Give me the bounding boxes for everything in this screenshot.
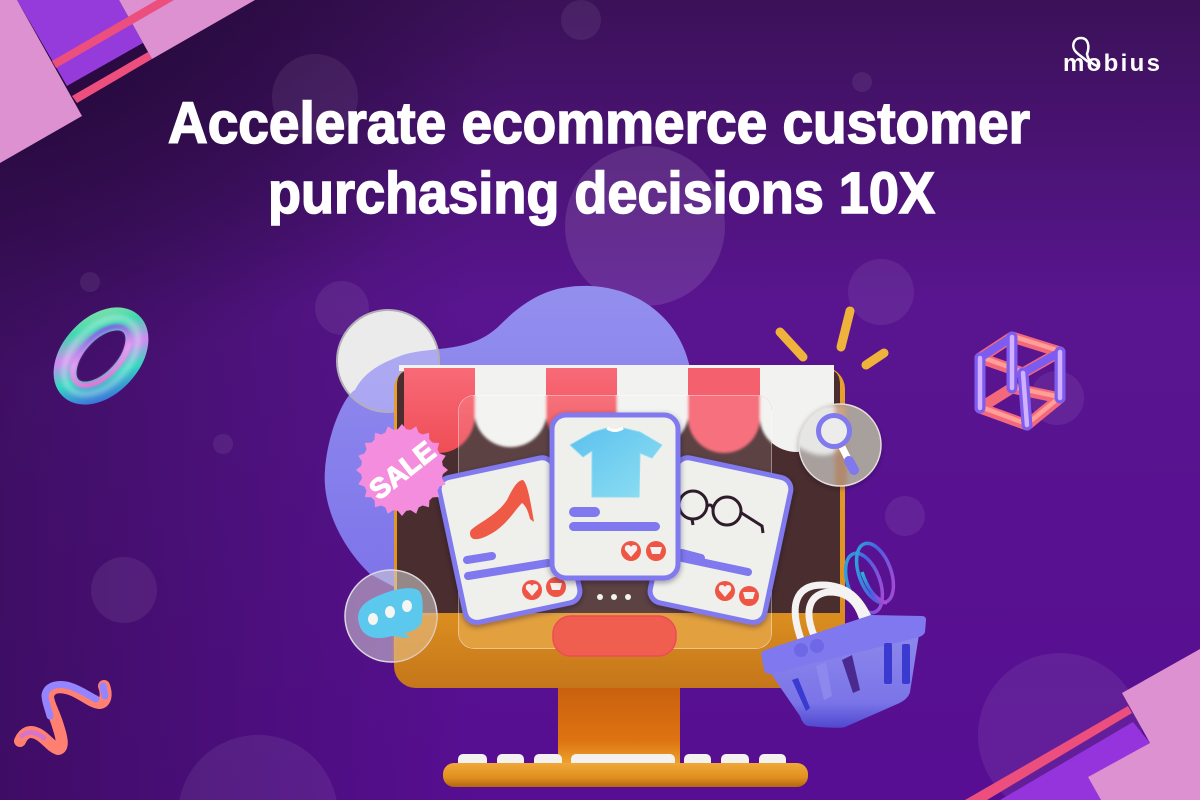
product card: shoe (437, 456, 582, 625)
shoe (470, 480, 534, 539)
handle joints (794, 639, 824, 657)
monitor stand (558, 686, 680, 764)
chat bubble (358, 588, 423, 638)
sparkle rays (780, 311, 884, 365)
text lines (569, 507, 600, 517)
magnifier icon (842, 447, 849, 461)
basket slots (792, 643, 910, 711)
corner shapes: bottom right (965, 649, 1200, 800)
logo: mobius (1063, 38, 1160, 77)
handles (795, 585, 868, 642)
cube vertical edges (980, 337, 1060, 425)
sale badge: SALE (363, 435, 441, 506)
chat glass circle (345, 570, 444, 664)
heart and cart badges (715, 581, 735, 601)
cube rear and diagonal edges (980, 337, 1060, 425)
shopping basket (761, 538, 926, 728)
logo: mobius: mobius (1063, 50, 1160, 77)
carousel dots (597, 594, 631, 600)
spring (838, 538, 901, 618)
icon: impossible cube (980, 336, 1060, 425)
keyboard (443, 754, 808, 787)
sale badge (356, 424, 448, 516)
glasses (679, 491, 763, 533)
monitor screen (397, 370, 840, 613)
basket rim (761, 615, 926, 674)
title (168, 91, 1030, 226)
t-shirt (570, 428, 662, 497)
red button (553, 616, 676, 656)
text lines (467, 556, 548, 576)
title: purchasing decisions 10X (268, 161, 935, 226)
basket body (765, 628, 920, 728)
monitor body (394, 367, 845, 688)
awning (399, 365, 834, 453)
glass circle overlay (337, 310, 439, 412)
magnifier glass circle (790, 400, 881, 490)
glass panel (458, 395, 772, 649)
heart and cart badges (522, 580, 542, 600)
text lines (682, 553, 748, 572)
product card: glasses (648, 456, 793, 625)
title: Accelerate ecommerce customer (168, 91, 1030, 156)
product card: t-shirt (552, 415, 678, 578)
icon: torus (50, 304, 152, 408)
main illustration: ecommerce storefront monitor (325, 286, 926, 787)
heart and cart badges (621, 541, 641, 561)
icon: squiggle (20, 685, 106, 749)
glass circle behind blob (337, 310, 439, 412)
blob backdrop (325, 286, 700, 590)
corner shapes: top left (0, 0, 255, 163)
